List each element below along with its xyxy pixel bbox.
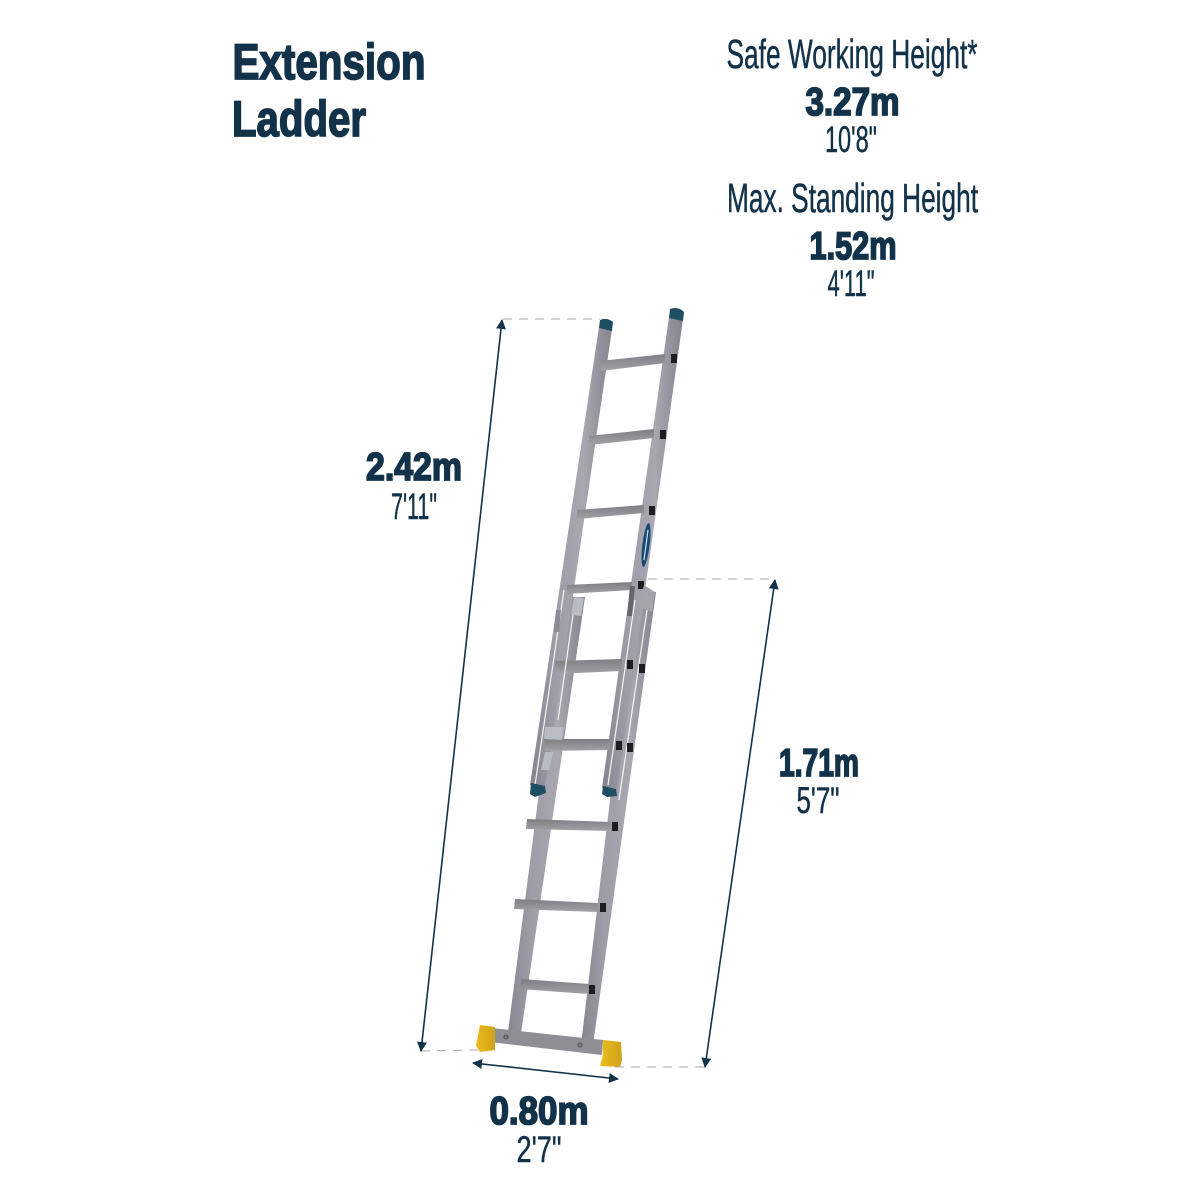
brand logo	[640, 523, 652, 567]
max standing height spec	[727, 175, 978, 304]
label: 1.71m	[779, 742, 859, 821]
title	[232, 34, 426, 147]
safe working height spec: Safe Working Height*	[726, 31, 978, 77]
lower section rungs	[514, 819, 611, 994]
max standing height spec: 4'11"	[828, 263, 874, 304]
end caps	[530, 308, 684, 797]
dimension: closed height	[615, 579, 775, 1067]
rung rivets	[616, 354, 677, 752]
label: 0.80m: 2'7"	[516, 1129, 562, 1170]
bar bolts	[504, 1035, 582, 1047]
label: 2.42m	[366, 446, 462, 527]
safe working height spec: 3.27m	[806, 81, 900, 124]
stabiliser bar	[490, 1028, 603, 1055]
lower rung rivets	[589, 822, 618, 994]
upper section rails	[530, 317, 683, 790]
upper section rungs	[544, 354, 665, 751]
label: 1.71m: 1.71m	[779, 742, 859, 785]
title: Ladder	[232, 91, 366, 147]
rail highlights	[535, 590, 647, 800]
label: 2.42m: 7'11"	[391, 486, 437, 527]
label: 1.71m: 5'7"	[796, 780, 840, 821]
label: 2.42m: 2.42m	[366, 446, 462, 489]
dimension: base width	[473, 1063, 618, 1079]
locking hooks and brackets	[541, 585, 655, 770]
max standing height spec: 1.52m	[810, 225, 896, 268]
yellow feet	[476, 1025, 622, 1067]
safe working height spec	[726, 31, 978, 160]
lower section rails	[507, 590, 656, 1045]
ladder illustration	[476, 308, 684, 1067]
max standing height spec: Max. Standing Height	[727, 175, 978, 221]
safe working height spec: 10'8"	[825, 119, 877, 160]
dimension: ladder length	[421, 319, 600, 1051]
title: Extension	[232, 34, 426, 90]
label: 0.80m	[490, 1090, 588, 1170]
label: 0.80m: 0.80m	[490, 1090, 588, 1133]
